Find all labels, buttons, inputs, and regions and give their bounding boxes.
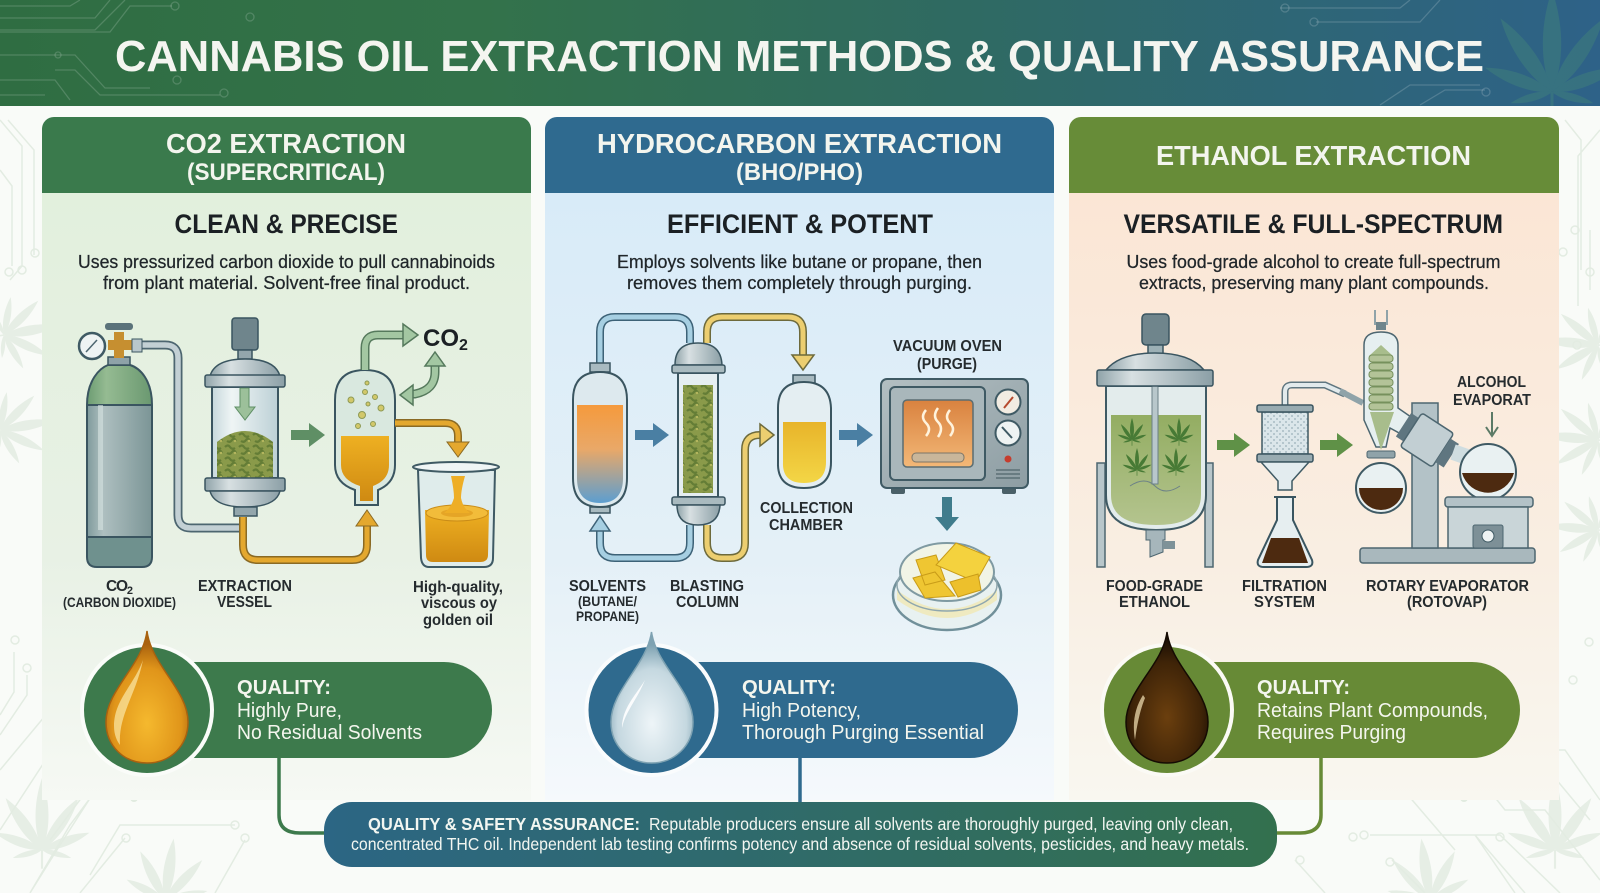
assurance text <box>351 814 1249 854</box>
quality callout: ethanol <box>1102 632 1520 775</box>
subheading: CLEAN & PRECISE <box>174 209 398 239</box>
label: CO2 gas: CO <box>423 325 459 352</box>
header text: CO2 EXTRACTION <box>166 128 406 159</box>
arrow: filter to rotovap <box>1320 433 1353 457</box>
diagram: closed-loop hydrocarbon apparatus <box>569 317 1028 630</box>
quality pill <box>651 662 1018 758</box>
quality text <box>1257 677 1488 744</box>
drop badge circle <box>82 645 212 775</box>
labels: ethanol diagram <box>1106 374 1531 611</box>
labels: CO2 diagram: EXTRACTION <box>198 578 292 595</box>
quality text: High Potency, <box>742 700 861 722</box>
quality callout: hydrocarbon <box>586 632 1018 775</box>
description <box>617 251 982 293</box>
description: from plant material. Solvent-free final product. <box>103 272 470 293</box>
labels: CO2 diagram <box>63 578 503 629</box>
description: Employs solvents like butane or propane, then <box>617 251 982 272</box>
panel: hydrocarbon extraction <box>545 117 1054 803</box>
drop badge circle <box>586 645 716 775</box>
arrow: vessel to separator <box>291 423 325 447</box>
labels: hydrocarbon diagram: CHAMBER <box>769 517 843 534</box>
quality pill <box>147 662 492 758</box>
icon: rotary evaporator <box>1356 310 1535 563</box>
quality text: QUALITY: <box>742 677 836 699</box>
description <box>78 251 495 293</box>
quality text: Thorough Purging Essential <box>742 722 984 744</box>
pipe: cylinder to vessel <box>140 345 243 528</box>
labels: CO2 diagram: CO <box>106 578 128 595</box>
labels: ethanol diagram: (ROTOVAP) <box>1407 594 1487 611</box>
icon: collection chamber <box>778 375 831 488</box>
icon: clear drop <box>611 632 693 763</box>
subheading: VERSATILE & FULL-SPECTRUM <box>1124 209 1503 239</box>
label: CO2 gas: 2 <box>459 337 468 354</box>
icon: beaker of golden oil <box>413 462 499 567</box>
panel body <box>545 193 1054 800</box>
header text: HYDROCARBON EXTRACTION <box>597 128 1002 159</box>
icon: solvent tank <box>573 363 627 513</box>
labels: hydrocarbon diagram: (BUTANE/ <box>578 593 637 609</box>
labels: ethanol diagram: SYSTEM <box>1254 594 1315 611</box>
icon: filtration system <box>1257 385 1363 567</box>
quality text: Highly Pure, <box>237 700 342 722</box>
arrow: tank to column <box>635 423 669 447</box>
arrow: chamber to oven <box>839 423 873 447</box>
panel body <box>42 193 531 800</box>
header text <box>166 128 406 186</box>
labels: ethanol diagram: FILTRATION <box>1242 578 1327 595</box>
labels: ethanol diagram: FOOD-GRADE <box>1106 578 1203 595</box>
panel: ethanol extraction <box>1069 117 1559 833</box>
labels: hydrocarbon diagram: BLASTING <box>670 578 744 595</box>
header text: (BHO/PHO) <box>736 159 863 186</box>
drop badge circle <box>1102 645 1232 775</box>
labels: CO2 diagram: VESSEL <box>217 594 272 611</box>
quality text: No Residual Solvents <box>237 722 422 744</box>
connector: ethanol to assurance bar <box>1276 758 1321 833</box>
arrow: oven to shatter <box>935 497 959 531</box>
labels: hydrocarbon diagram: (PURGE) <box>917 356 977 373</box>
panel header <box>1069 117 1559 193</box>
icon: golden oil drop <box>106 631 188 763</box>
labels: ethanol diagram: ALCOHOL <box>1457 374 1526 391</box>
banner circuit traces <box>0 0 1490 105</box>
icon: extraction vessel <box>205 318 285 516</box>
quality pill <box>1167 662 1520 758</box>
quality and safety assurance bar <box>324 802 1277 867</box>
connector: CO2 to assurance bar <box>279 758 326 833</box>
icon: jar of shatter <box>893 543 1001 630</box>
arrow: CO2 recirculated <box>365 324 418 370</box>
pipes: extract flow <box>707 317 803 558</box>
arrow: alcohol evaporating <box>1486 412 1498 436</box>
diagram: CO2 extraction apparatus <box>63 318 503 629</box>
icon: CO2 cylinder <box>79 323 152 567</box>
labels: CO2 diagram: 2 <box>127 585 133 597</box>
header text <box>597 128 1002 186</box>
pipes: solvent loop <box>600 317 690 558</box>
connector: hydrocarbon to assurance bar <box>798 758 802 803</box>
labels: CO2 diagram: (CARBON DIOXIDE) <box>63 594 176 610</box>
labels: hydrocarbon diagram: SOLVENTS <box>569 578 646 595</box>
icon: separator <box>335 370 395 505</box>
description: Uses food-grade alcohol to create full-spectrum <box>1126 251 1500 272</box>
quality text <box>237 677 422 744</box>
arrow: tank to filter <box>1217 433 1250 457</box>
assurance text: QUALITY & SAFETY ASSURANCE: <box>368 814 640 834</box>
quality text: QUALITY: <box>1257 677 1350 699</box>
title banner <box>0 0 1600 106</box>
icon: dark oil drop <box>1126 632 1208 763</box>
description: extracts, preserving many plant compounds. <box>1139 272 1489 293</box>
labels: CO2 diagram: golden oil <box>423 612 493 629</box>
quality text <box>742 677 984 744</box>
icon: blasting column <box>672 343 725 525</box>
icon: vacuum oven <box>881 379 1028 494</box>
quality text: QUALITY: <box>237 677 331 699</box>
labels: hydrocarbon diagram <box>569 338 1002 624</box>
header text: (SUPERCRITICAL) <box>187 159 385 186</box>
assurance text: concentrated THC oil. Independent lab testing confirms potency and absence of residual solvents, pesticides, and heavy metals. <box>351 834 1249 854</box>
labels: hydrocarbon diagram: COLUMN <box>676 594 739 611</box>
panel header <box>42 117 531 193</box>
labels: CO2 diagram: High-quality, <box>413 579 503 596</box>
diagram: ethanol apparatus <box>1097 310 1535 611</box>
description: removes them completely through purging. <box>627 272 972 293</box>
icon: food-grade ethanol tank <box>1097 314 1213 567</box>
pipe: oil to beaker <box>395 423 469 457</box>
labels: hydrocarbon diagram: VACUUM OVEN <box>893 338 1002 355</box>
panel body <box>1069 193 1559 800</box>
description <box>1126 251 1500 293</box>
labels: hydrocarbon diagram: PROPANE) <box>576 608 639 624</box>
banner leaf <box>1486 0 1600 106</box>
arrow: CO2 return <box>400 352 445 405</box>
title: CANNABIS OIL EXTRACTION METHODS & QUALITY ASSURANCE <box>115 32 1484 81</box>
subheading: EFFICIENT & POTENT <box>667 209 933 239</box>
assurance text: Reputable producers ensure all solvents are thoroughly purged, leaving only clean, <box>649 814 1233 834</box>
labels: ethanol diagram: ETHANOL <box>1119 594 1190 611</box>
header text: ETHANOL EXTRACTION <box>1156 140 1471 171</box>
quality callout: CO2 <box>82 631 492 775</box>
labels: hydrocarbon diagram: COLLECTION <box>760 500 853 517</box>
labels: ethanol diagram: ROTARY EVAPORATOR <box>1366 578 1529 595</box>
quality text: Requires Purging <box>1257 722 1406 744</box>
pipe: oil to separator <box>243 517 367 560</box>
panel: CO2 extraction <box>42 117 531 833</box>
quality text: Retains Plant Compounds, <box>1257 700 1488 722</box>
panel header <box>545 117 1054 193</box>
labels: ethanol diagram: EVAPORAT <box>1453 392 1531 409</box>
description: Uses pressurized carbon dioxide to pull cannabinoids <box>78 251 495 272</box>
labels: CO2 diagram: viscous oy <box>421 595 497 612</box>
